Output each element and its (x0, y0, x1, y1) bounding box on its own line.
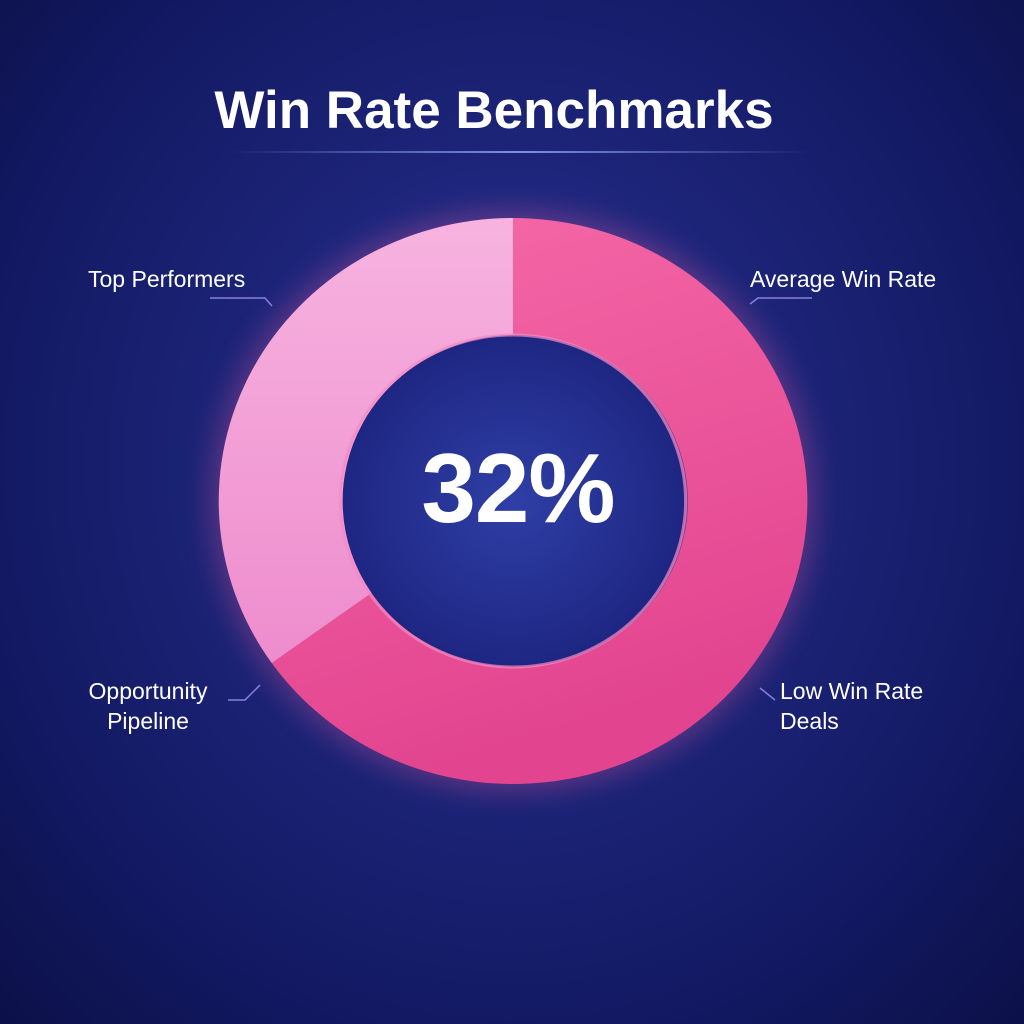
segment: top performers (light pink) (219, 218, 513, 663)
label: average win rate: Average Win Rate (750, 266, 936, 292)
label: opportunity pipeline: Opportunity (89, 678, 207, 704)
label: top performers: Top Performers (88, 266, 245, 292)
label: low win rate deals: Deals (780, 708, 839, 734)
label: low win rate deals: Low Win Rate (780, 678, 923, 704)
title: Win Rate Benchmarks (214, 81, 774, 140)
center value: 32% (421, 433, 615, 543)
segment: average / low win rate (hot pink) (272, 218, 807, 784)
label: opportunity pipeline (89, 678, 208, 734)
label: opportunity pipeline: Pipeline (107, 708, 189, 734)
label: low win rate deals (780, 678, 923, 734)
